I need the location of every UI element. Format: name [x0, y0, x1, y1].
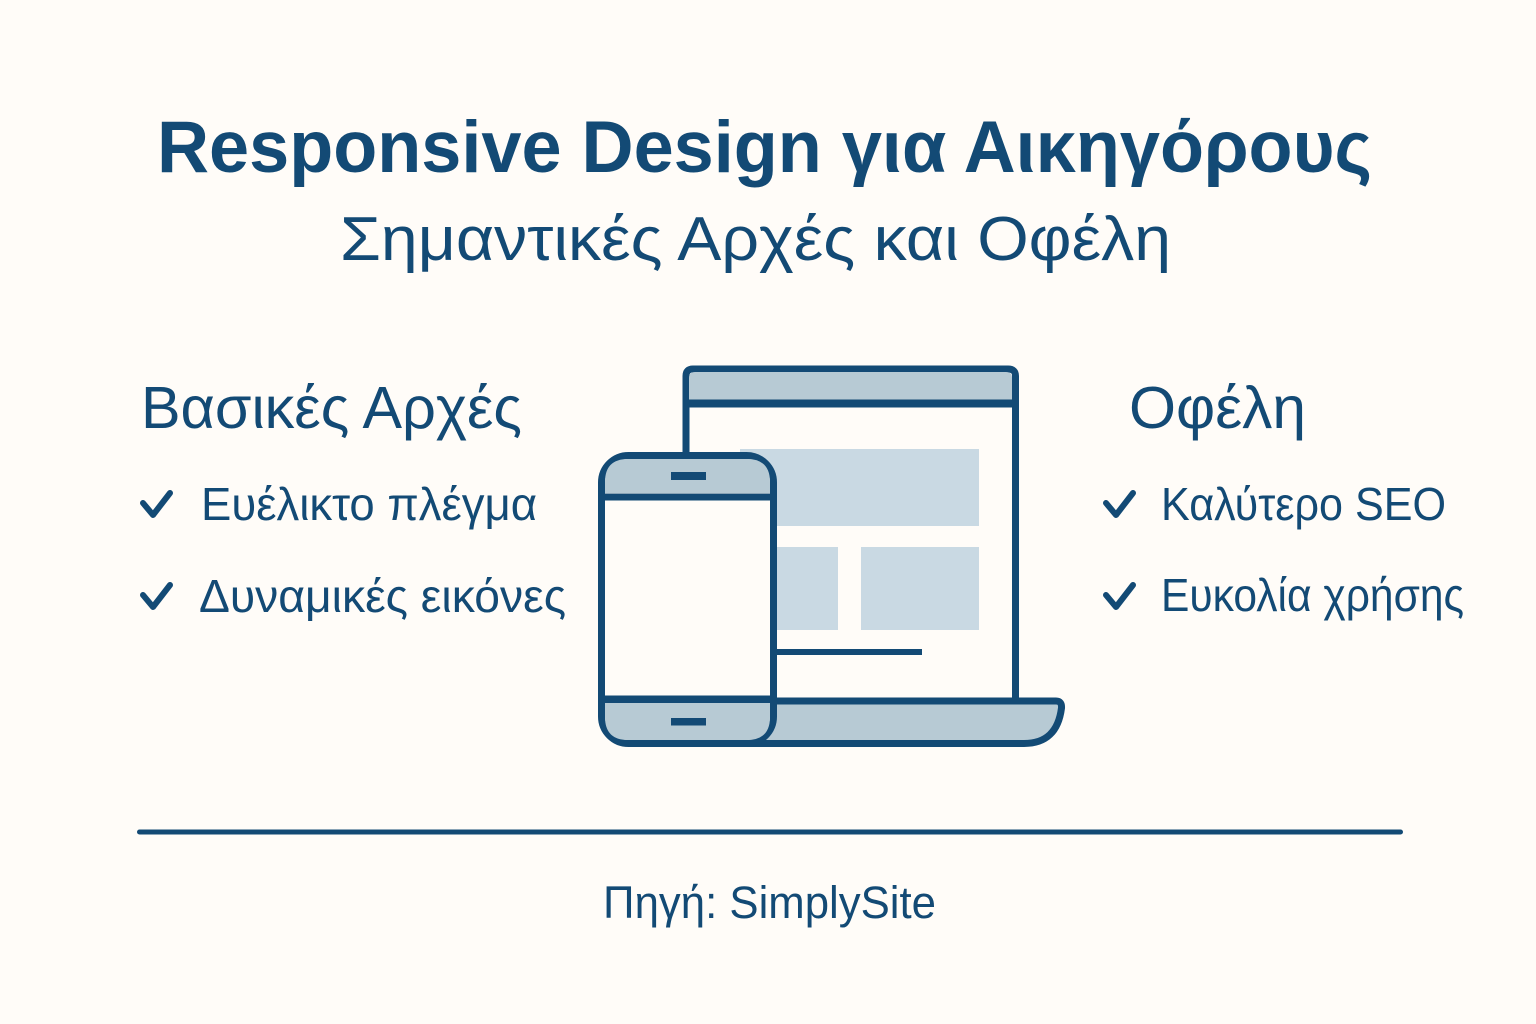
- heading: benefits: Οφέλη: [1129, 375, 1306, 441]
- content line: [770, 649, 922, 655]
- phone home button: [671, 718, 706, 726]
- list item: better SEO: Καλύτερο SEO: [1161, 478, 1446, 530]
- laptop base: [740, 701, 1062, 744]
- list item: flexible grid: Ευέλικτο πλέγμα: [201, 478, 537, 530]
- icon: check mark: [143, 585, 170, 607]
- icon: check mark: [1106, 585, 1133, 607]
- list item: dynamic images: Δυναμικές εικόνες: [199, 570, 566, 622]
- list item: ease of use: Ευκολία χρήσης: [1161, 569, 1464, 621]
- laptop screen: [686, 369, 1016, 701]
- phone top bar: [605, 459, 770, 493]
- icon: responsive devices: [602, 369, 1062, 744]
- panel: benefits: [1106, 375, 1464, 621]
- panel: basic principles: [141, 375, 566, 622]
- content block: left card: [770, 547, 838, 630]
- phone bottom bar: [605, 703, 770, 740]
- laptop header bar: [689, 372, 1012, 400]
- icon: check mark: [1106, 493, 1133, 515]
- subtitle: Σημαντικές Αρχές και Οφέλη: [340, 205, 1171, 274]
- heading: basic principles: Βασικές Αρχές: [141, 375, 522, 441]
- content block: right card: [861, 547, 979, 630]
- phone body: [602, 456, 774, 744]
- content block: hero: [740, 449, 979, 526]
- icon: check mark: [143, 493, 170, 515]
- phone top speaker: [671, 472, 706, 480]
- laptop: [686, 369, 1062, 744]
- source: Πηγή: SimplySite: [603, 877, 936, 928]
- phone: [602, 456, 774, 744]
- title: Responsive Design για Αικηγόρους: [157, 107, 1372, 188]
